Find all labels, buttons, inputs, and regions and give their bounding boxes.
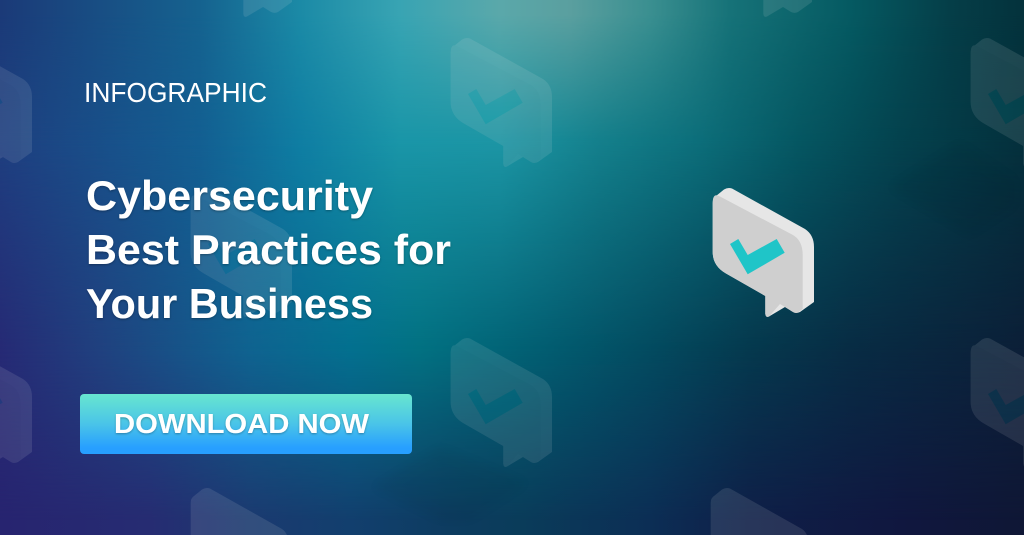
title: Best Practices for	[86, 226, 451, 273]
title	[86, 172, 451, 327]
button: download now	[80, 394, 412, 454]
title: Your Business	[86, 280, 373, 327]
icon: speech bubble with check mark	[713, 188, 814, 317]
button: download now: DOWNLOAD NOW	[114, 408, 370, 439]
background shadows	[373, 143, 1015, 520]
label: infographic: INFOGRAPHIC	[84, 77, 267, 108]
title: Cybersecurity	[86, 172, 374, 219]
